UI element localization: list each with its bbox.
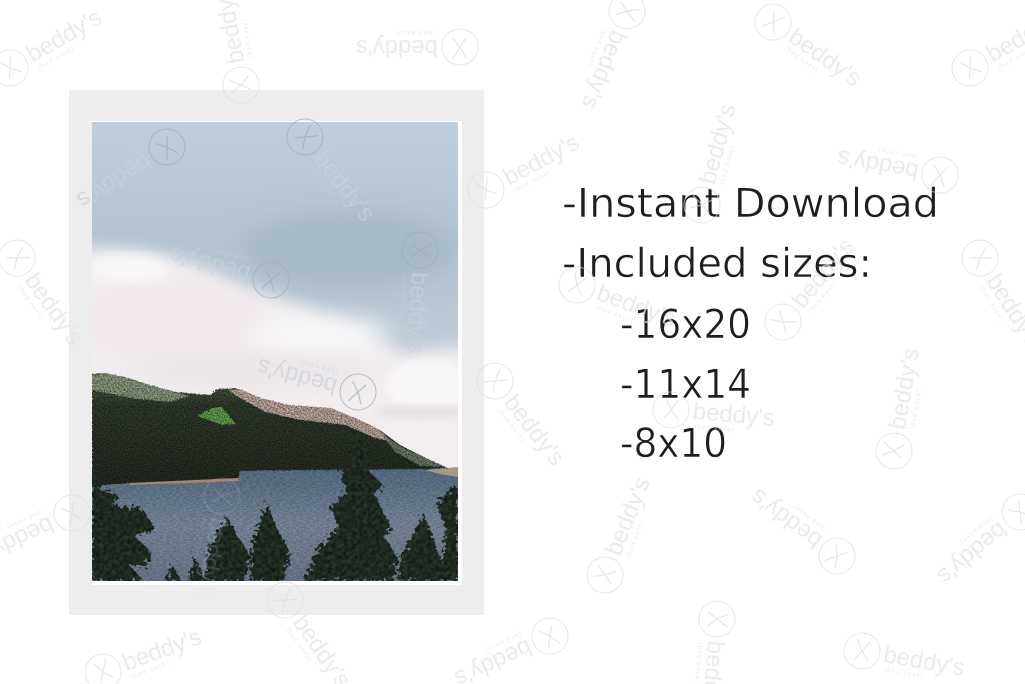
watermark 28 xyxy=(448,612,574,684)
watermark 15: (bed ease) xyxy=(594,305,635,324)
watermark 4: (bed ease) xyxy=(586,27,607,67)
mountain xyxy=(92,373,448,486)
watermark 30: (bed ease) xyxy=(883,667,925,680)
watermark 27: (bed ease) xyxy=(693,642,703,683)
watermark 30: beddy's xyxy=(881,641,967,682)
watermark 16: beddy's xyxy=(786,233,860,314)
watermark 7: (bed ease) xyxy=(102,145,139,172)
watermark 20: beddy's xyxy=(692,398,776,432)
watermark 11: beddy's xyxy=(835,144,921,185)
watermark 18: beddy's xyxy=(254,353,340,400)
watermark 10 xyxy=(680,100,746,227)
watermark 29: (bed ease) xyxy=(131,661,171,680)
line: size 16x20: -16x20 xyxy=(620,302,751,348)
watermark 10: beddy's xyxy=(694,101,741,187)
watermark 15 xyxy=(554,262,681,337)
watermark 16: (bed ease) xyxy=(808,279,839,314)
watermark 12: beddy's xyxy=(402,271,433,355)
watermark 8 xyxy=(280,112,383,230)
watermark 5: (bed ease) xyxy=(783,46,820,74)
watermark 14 xyxy=(166,236,293,302)
watermark 5 xyxy=(748,0,869,96)
watermark 9: beddy's xyxy=(499,129,584,191)
line: included sizes: -Included sizes: xyxy=(562,241,872,287)
watermark 24: beddy's xyxy=(600,473,656,559)
watermark 26: beddy's xyxy=(932,516,1012,590)
watermark 11 xyxy=(834,139,961,196)
watermark 25: beddy's xyxy=(746,483,827,554)
watermark 19 xyxy=(470,356,573,474)
watermark 8: beddy's xyxy=(308,146,380,227)
watermark 11: (bed ease) xyxy=(877,146,919,159)
picture frame xyxy=(69,90,484,615)
watermark 21: beddy's xyxy=(884,346,925,432)
watermark 19: beddy's xyxy=(498,390,570,471)
watermark 5: beddy's xyxy=(784,23,866,92)
watermark 23 xyxy=(186,475,243,602)
line: instant download: -Instant Download xyxy=(562,181,939,227)
watermark 10: (bed ease) xyxy=(720,145,736,186)
watermark 26: (bed ease) xyxy=(958,514,993,545)
watermark 29 xyxy=(80,620,207,684)
watermark 2 xyxy=(205,0,262,106)
watermark 1 xyxy=(0,0,109,93)
watermark 13 xyxy=(0,233,91,354)
watermark 4: beddy's xyxy=(576,27,632,113)
watermark 14: beddy's xyxy=(167,241,253,288)
watermark 24 xyxy=(582,472,661,598)
watermark 24: (bed ease) xyxy=(625,519,646,559)
watermark 16 xyxy=(758,231,864,347)
watermark 3 xyxy=(356,29,478,65)
watermark 21 xyxy=(873,345,930,472)
watermark 18 xyxy=(253,348,380,414)
tree line xyxy=(92,432,458,581)
watermark 14: (bed ease) xyxy=(211,246,252,262)
watermark 13: beddy's xyxy=(19,268,88,351)
watermark 19: (bed ease) xyxy=(496,408,526,444)
line: size 8x10: -8x10 xyxy=(620,421,727,467)
watermark 20 xyxy=(651,390,776,437)
watermark 28: (bed ease) xyxy=(483,630,522,653)
watermark 9: (bed ease) xyxy=(514,170,552,194)
watermark 21: (bed ease) xyxy=(910,388,923,430)
watermark 23: (bed ease) xyxy=(193,517,206,559)
watermark 3: (bed ease) xyxy=(394,29,435,35)
line: size 11x14: -11x14 xyxy=(620,362,751,408)
watermark 15: beddy's xyxy=(593,279,680,333)
watermark 8: (bed ease) xyxy=(306,164,336,200)
watermark 30 xyxy=(841,630,968,684)
watermark 23: beddy's xyxy=(191,515,232,601)
watermark 1: beddy's xyxy=(22,4,107,68)
watermark 31 xyxy=(260,575,359,684)
watermark 7: beddy's xyxy=(72,148,156,214)
watermark 4 xyxy=(571,0,650,114)
watermark 3: beddy's xyxy=(356,34,438,61)
watermark 27 xyxy=(690,599,737,684)
watermark 22 xyxy=(0,489,96,573)
watermark 22: (bed ease) xyxy=(5,507,44,530)
watermark 17 xyxy=(955,233,1025,356)
lake xyxy=(92,467,458,581)
watermark 26 xyxy=(929,487,1025,593)
watermark 18: (bed ease) xyxy=(298,358,339,374)
text block: product details xyxy=(562,181,939,467)
watermark 6 xyxy=(945,0,1025,93)
watermark 9 xyxy=(462,125,586,214)
watermark 12: (bed ease) xyxy=(399,274,407,315)
watermark 25 xyxy=(743,479,862,581)
watermark 29: beddy's xyxy=(119,623,205,677)
watermark 31: (bed ease) xyxy=(285,627,313,664)
watermark 13: (bed ease) xyxy=(17,285,45,322)
watermark 12 xyxy=(397,231,439,355)
sky and clouds xyxy=(92,122,458,468)
watermark 1: (bed ease) xyxy=(38,46,76,71)
watermark 25: (bed ease) xyxy=(792,502,828,531)
watermark 2: (bed ease) xyxy=(241,17,254,58)
photo: mountain lake under cloudy sky xyxy=(92,122,458,581)
watermark 17: (bed ease) xyxy=(978,286,1005,323)
watermark 20: (bed ease) xyxy=(694,424,735,434)
watermark 7 xyxy=(69,122,192,217)
